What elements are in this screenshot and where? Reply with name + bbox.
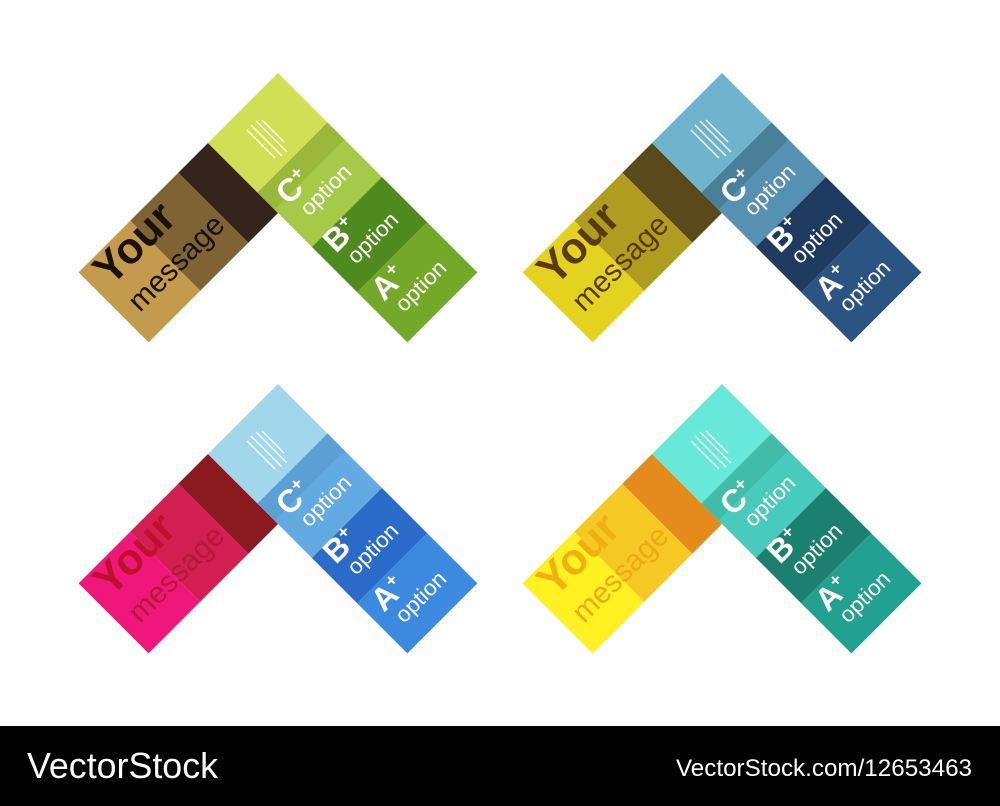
- text: options: +: [381, 258, 402, 280]
- left arm: [523, 454, 722, 653]
- text: options: +: [333, 210, 354, 232]
- text: options: +: [730, 162, 751, 184]
- right arm: [208, 73, 477, 342]
- text: your message: message: [122, 519, 231, 629]
- text: options: [268, 470, 451, 628]
- text: options: +: [381, 569, 402, 591]
- text: options: option: [739, 159, 800, 221]
- text: your message: [83, 192, 231, 318]
- icon: lines: [691, 431, 731, 469]
- text: your message: Your: [83, 503, 185, 605]
- text: options: +: [825, 569, 846, 591]
- text: options: option: [342, 207, 403, 269]
- text: options: A: [363, 265, 405, 307]
- text: your message: message: [566, 519, 675, 629]
- text: options: C: [268, 169, 310, 211]
- text: options: +: [286, 162, 307, 184]
- text: your message: Your: [527, 192, 629, 294]
- text: options: [712, 159, 895, 317]
- text: options: option: [342, 518, 403, 580]
- icon: lines: [247, 431, 287, 469]
- text: your message: message: [122, 208, 231, 318]
- chevron: yellow blue (top-right): [523, 73, 921, 342]
- text: options: option: [834, 566, 895, 628]
- chevron: green brown (top-left): [79, 73, 477, 342]
- text: options: option: [390, 566, 451, 628]
- text: options: [712, 470, 895, 628]
- text: options: option: [739, 470, 800, 532]
- text: your message: [83, 503, 231, 629]
- text: options: option: [786, 207, 847, 269]
- text: options: B: [315, 528, 357, 570]
- left arm: [523, 143, 722, 342]
- text: options: [268, 159, 451, 317]
- footer: brand: VectorStock: [27, 745, 219, 786]
- text: options: C: [712, 480, 754, 522]
- text: your message: [527, 192, 675, 318]
- icon: lines: [247, 120, 287, 158]
- left arm: [79, 143, 278, 342]
- text: options: +: [825, 258, 846, 280]
- text: options: A: [807, 576, 849, 618]
- right arm: [208, 384, 477, 653]
- text: options: option: [786, 518, 847, 580]
- text: options: +: [777, 521, 798, 543]
- chevron: pink blue (bottom-left): [79, 384, 477, 653]
- text: options: C: [712, 169, 754, 211]
- footer: url: VectorStock.com/12653463: [676, 755, 972, 782]
- right arm: [652, 73, 921, 342]
- text: options: B: [759, 528, 801, 570]
- text: options: option: [834, 255, 895, 317]
- text: your message: message: [566, 208, 675, 318]
- text: options: B: [759, 217, 801, 259]
- chevron: yellow teal (bottom-right): [523, 384, 921, 653]
- text: options: A: [807, 265, 849, 307]
- text: options: +: [730, 473, 751, 495]
- text: options: +: [286, 473, 307, 495]
- text: options: option: [295, 159, 356, 221]
- icon: lines: [691, 120, 731, 158]
- right arm: [652, 384, 921, 653]
- text: options: +: [777, 210, 798, 232]
- text: options: C: [268, 480, 310, 522]
- text: options: option: [390, 255, 451, 317]
- text: options: option: [295, 470, 356, 532]
- text: your message: Your: [527, 503, 629, 605]
- left arm: [79, 454, 278, 653]
- text: options: +: [333, 521, 354, 543]
- text: options: B: [315, 217, 357, 259]
- text: options: A: [363, 576, 405, 618]
- text: your message: [527, 503, 675, 629]
- text: your message: Your: [83, 192, 185, 294]
- footer bar: [0, 726, 1000, 806]
